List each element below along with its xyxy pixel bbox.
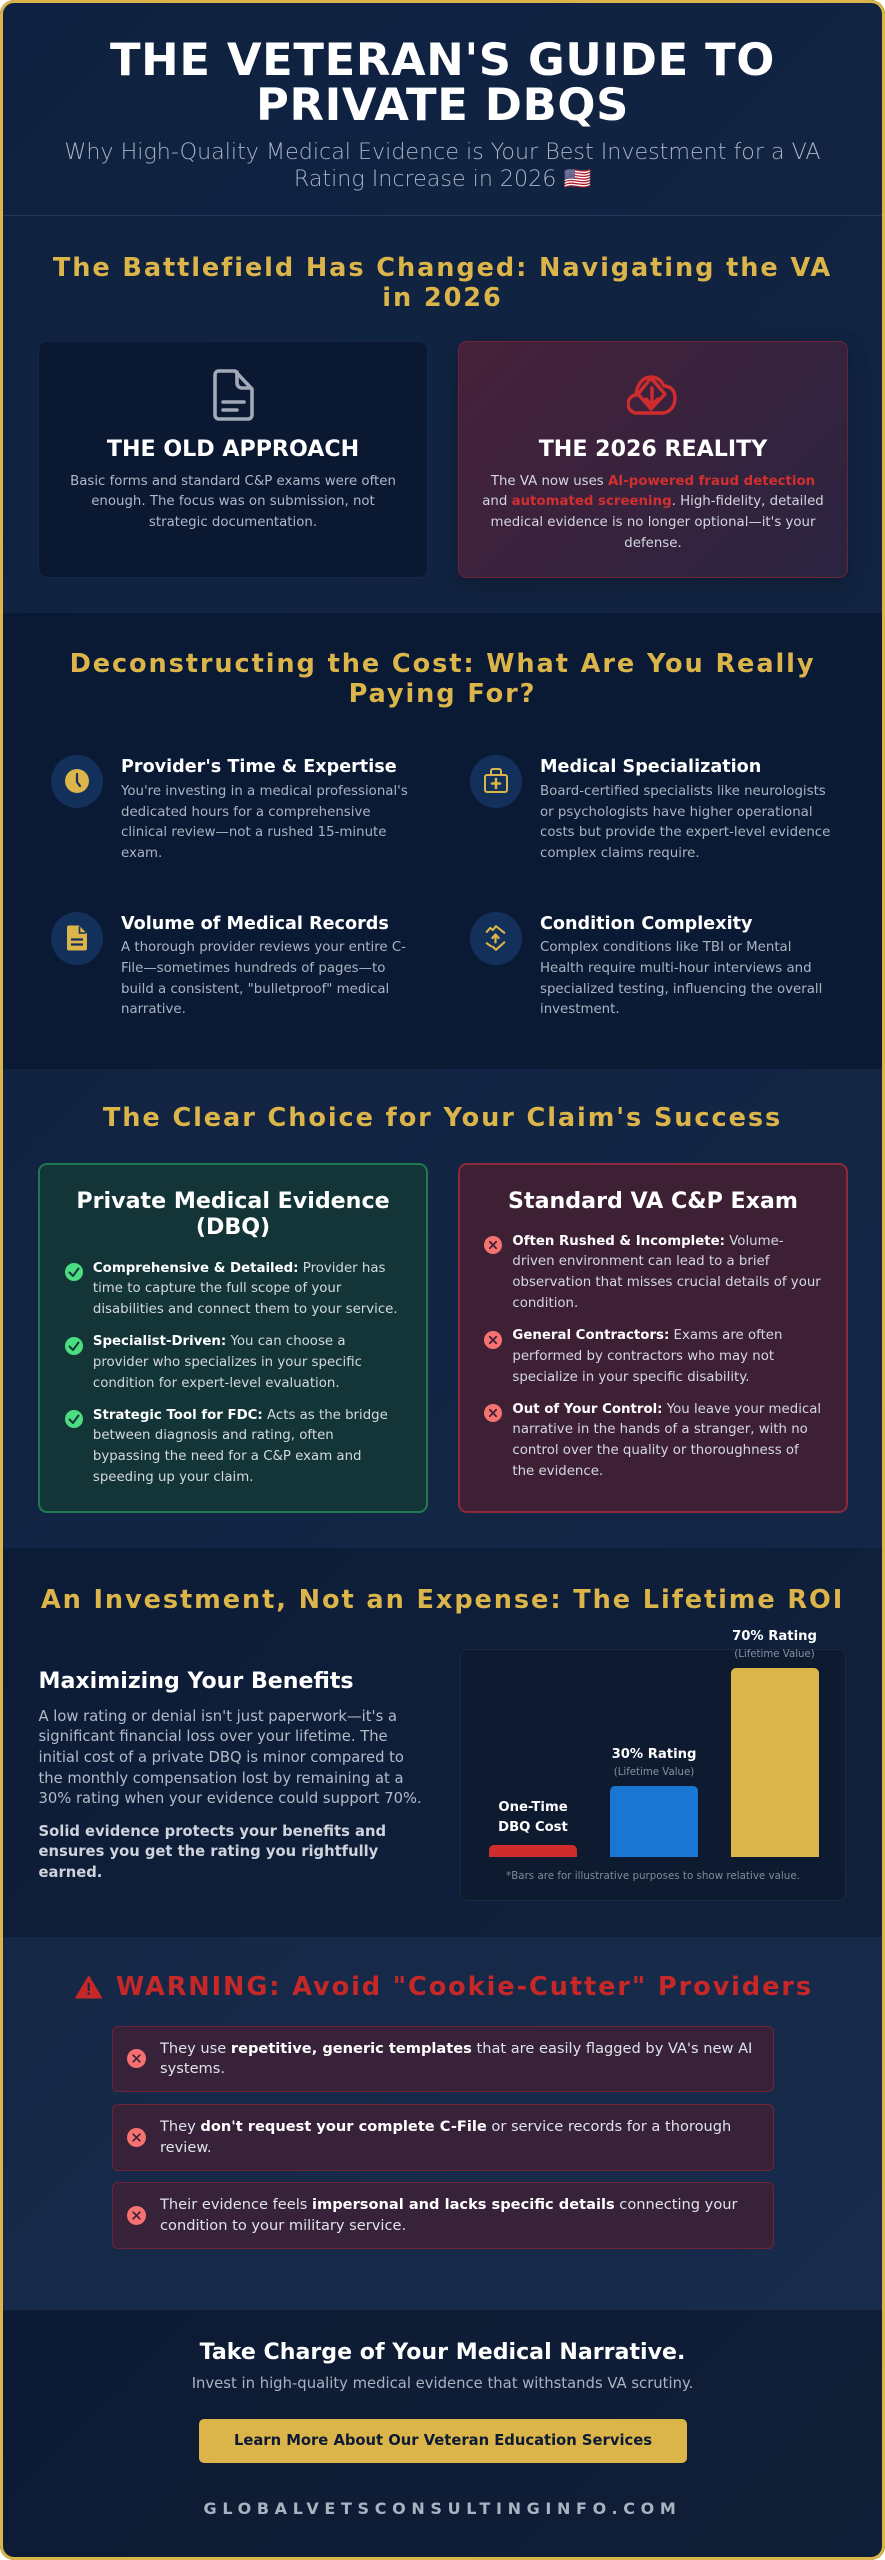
item text: investment. [540,1002,620,1017]
icon: cross [484,1236,502,1254]
list text [93,1334,362,1391]
item text: clinical review—not a rushed 15-minute [121,825,386,840]
item heading: Medical Specialization [540,757,761,777]
item text: Complex conditions like TBI or Mental [540,940,791,955]
item heading: Provider's Time & Expertise [121,757,397,777]
button: Learn More About Our Veteran Education Services [234,2432,652,2448]
card text: medical evidence is no longer optional—it's your [491,515,815,530]
item: provider's time [51,755,408,861]
block text: initial cost of a private DBQ is minor compared to [38,1749,404,1766]
list text: disabilities and connect them to your service. [93,1302,398,1317]
bar sublabel: 70% rating: (Lifetime Value) [734,1649,815,1660]
block callout: Solid evidence protects your benefits and [38,1823,386,1840]
item text: narrative. [121,1002,186,1017]
item: medical specialization [470,755,830,861]
bar chart [460,1649,846,1901]
heading [70,649,815,709]
icon: filled document [51,912,103,964]
block callout [38,1823,386,1881]
section: warning [0,1937,885,2309]
panel heading: (DBQ) [196,1214,270,1240]
list text [93,1261,398,1317]
icon: clock [51,755,103,808]
title: THE VETERAN'S GUIDE TO [110,33,775,86]
list text: Often Rushed & Incomplete: Volume- [512,1234,784,1249]
panel heading: Standard VA C&P Exam [508,1188,798,1214]
heading: Deconstructing the Cost: What Are You Really [70,649,815,679]
section: the clear choice [0,1069,885,1548]
list text: bypassing the need for a C&P exam and [93,1449,362,1464]
heading: The Battlefield Has Changed: Navigating the VA [53,253,832,283]
block text: the monthly compensation lost by remaining at a [38,1770,404,1787]
list text: performed by contractors who may not [512,1349,774,1364]
item text [121,784,408,861]
panel: standard VA C&P exam [458,1163,848,1513]
list text: specialize in your specific disability. [512,1370,750,1385]
card text: enough. The focus was on submission, not [91,494,375,509]
list item: rushed [484,1234,821,1311]
bar sublabel: 30% rating: (Lifetime Value) [614,1767,694,1778]
list item: strategic tool [65,1408,388,1485]
card text: defense. [624,536,682,551]
item text: specialized testing, influencing the overall [540,982,822,997]
footer heading: Take Charge of Your Medical Narrative. [200,2339,685,2365]
list text: driven environment can lead to a brief [512,1254,769,1269]
bar label: 30% rating: 30% Rating [612,1747,696,1762]
list text [512,1328,782,1385]
bar: 70% rating [730,1668,818,1857]
list text: narrative in the hands of a stranger, with no [512,1422,808,1437]
item text: Health require multi-hour interviews and [540,961,812,976]
block callout: earned. [38,1864,102,1881]
warning text: Their evidence feels impersonal and lacks specific details connecting your [160,2196,738,2213]
item text [540,784,830,861]
icon: complexity arrows [470,912,522,964]
heading [53,253,832,313]
button [199,2418,687,2462]
heading: WARNING: Avoid "Cookie-Cutter" Providers [116,1972,813,2002]
list item: out of your control [484,1402,821,1479]
block text: A low rating or denial isn't just paperwork—it's a [38,1708,397,1725]
list item: general contractors [484,1328,782,1385]
list text: condition for expert-level evaluation. [93,1376,340,1391]
list text [512,1402,821,1479]
warning 1 [112,2026,774,2092]
item heading: Volume of Medical Records [121,914,389,934]
panel: private medical evidence [38,1163,428,1513]
block text [38,1708,422,1807]
card text: Basic forms and standard C&P exams were often [70,474,396,489]
section: footer call to action [0,2308,885,2560]
warning text: review. [160,2139,212,2156]
bar: 30% rating [610,1786,698,1857]
list text: General Contractors: Exams are often [512,1328,782,1343]
list text [512,1234,821,1311]
heading: An Investment, Not an Expense: The Lifetime ROI [41,1585,844,1615]
warning 2 [112,2104,774,2171]
item text: build a consistent, "bulletproof" medical [121,982,389,997]
icon: cross [484,1331,502,1349]
list text [93,1408,388,1485]
block text: significant financial loss over your lifetime. The [38,1728,388,1745]
list text: Comprehensive & Detailed: Provider has [93,1261,385,1276]
text block: maximizing your benefits [38,1668,422,1881]
warning text: condition to your military service. [160,2217,406,2234]
footer text: Invest in high-quality medical evidence that withstands VA scrutiny. [192,2375,693,2392]
heading: in 2026 [382,283,503,313]
block heading: Maximizing Your Benefits [38,1668,354,1694]
warning text: They use repetitive, generic templates that are easily flagged by VA's new AI [160,2040,752,2057]
warning text: They don't request your complete C-File or service records for a thorough [160,2118,731,2135]
website: GLOBALVETSCONSULTINGINFO.COM [204,2499,681,2518]
item text: or psychologists have higher operational [540,804,813,820]
card heading: THE 2026 REALITY [539,436,767,462]
card text: and automated screening. High-fidelity, detailed [482,494,824,509]
icon: medical kit [470,755,522,808]
list text: condition. [512,1296,578,1311]
icon: check [65,1337,83,1355]
warning 3 [112,2182,774,2249]
warning text [160,2117,731,2158]
list text: Strategic Tool for FDC: Acts as the bridge [93,1408,388,1423]
item: condition complexity [470,912,822,1017]
bar label: 70% rating: 70% Rating [732,1629,817,1644]
item text [540,940,822,1017]
card text: strategic documentation. [149,515,317,530]
section: header [0,0,885,216]
chart note: *Bars are for illustrative purposes to show relative value. [506,1870,800,1882]
item text: dedicated hours for a comprehensive [121,804,371,820]
list text: speeding up your claim. [93,1470,253,1485]
panel heading [76,1188,390,1240]
item text: Board-certified specialists like neurologists [540,784,826,799]
list text: control over the quality or thoroughness of [512,1443,799,1458]
item text: exam. [121,846,162,861]
card text [70,474,396,530]
icon: cross [126,2049,146,2068]
subtitle [64,139,821,192]
list text: between diagnosis and rating, often [93,1428,334,1443]
list item: specialist-driven [65,1334,362,1391]
icon: warning triangle [75,1976,102,1998]
bar label: one-time DBQ cost [498,1800,568,1835]
bar label: one-time DBQ cost: One-Time [498,1800,568,1815]
item: volume of medical records [51,912,406,1017]
icon: document [213,369,254,421]
title: PRIVATE DBQS [256,78,629,131]
block callout: ensures you get the rating you rightfully [38,1843,378,1860]
icon: check [65,1263,83,1281]
section: the battlefield has changed [0,216,885,613]
icon: cloud download [627,375,677,415]
list item: comprehensive [65,1261,398,1317]
panel heading: Private Medical Evidence [76,1188,390,1214]
heading: Paying For? [349,679,536,709]
icon: cross [126,2128,146,2147]
block text: 30% rating when your evidence could support 70%. [38,1790,422,1807]
list text: time to capture the full scope of your [93,1281,341,1296]
icon: check [65,1410,83,1428]
icon: cross [484,1404,502,1422]
list text: Specialist-Driven: You can choose a [93,1334,346,1349]
section: lifetime ROI [0,1548,885,1937]
item text [121,940,406,1017]
item text: costs but provide the expert-level evidence [540,825,830,840]
bar: one-time DBQ cost [489,1845,577,1857]
item text: You're investing in a medical professional's [121,784,408,799]
warning text [160,2039,752,2080]
subtitle: Why High-Quality Medical Evidence is Your Best Investment for a VA [64,139,821,165]
item text: complex claims require. [540,846,700,861]
bar label: one-time DBQ cost: DBQ Cost [498,1820,568,1835]
item text: File—sometimes hundreds of pages—to [121,961,385,976]
warning text [160,2195,738,2237]
item text: A thorough provider reviews your entire C- [121,940,406,955]
panel: the 2026 reality [458,341,848,578]
list text: observation that misses crucial details of your [512,1275,821,1290]
panel: the old approach [38,341,428,578]
card text: The VA now uses AI-powered fraud detection [491,474,815,489]
icon: cross [126,2206,146,2225]
list text: the evidence. [512,1464,603,1479]
heading: The Clear Choice for Your Claim's Success [103,1103,782,1133]
list text: Out of Your Control: You leave your medical [512,1402,821,1417]
list text: provider who specializes in your specific [93,1355,362,1370]
card heading: THE OLD APPROACH [107,436,359,462]
section: deconstructing the cost [0,613,885,1069]
warning text: systems. [160,2060,225,2077]
card text [482,474,824,551]
item heading: Condition Complexity [540,914,752,934]
title [110,33,775,131]
subtitle: Rating Increase in 2026 🇺🇸 [294,166,591,192]
